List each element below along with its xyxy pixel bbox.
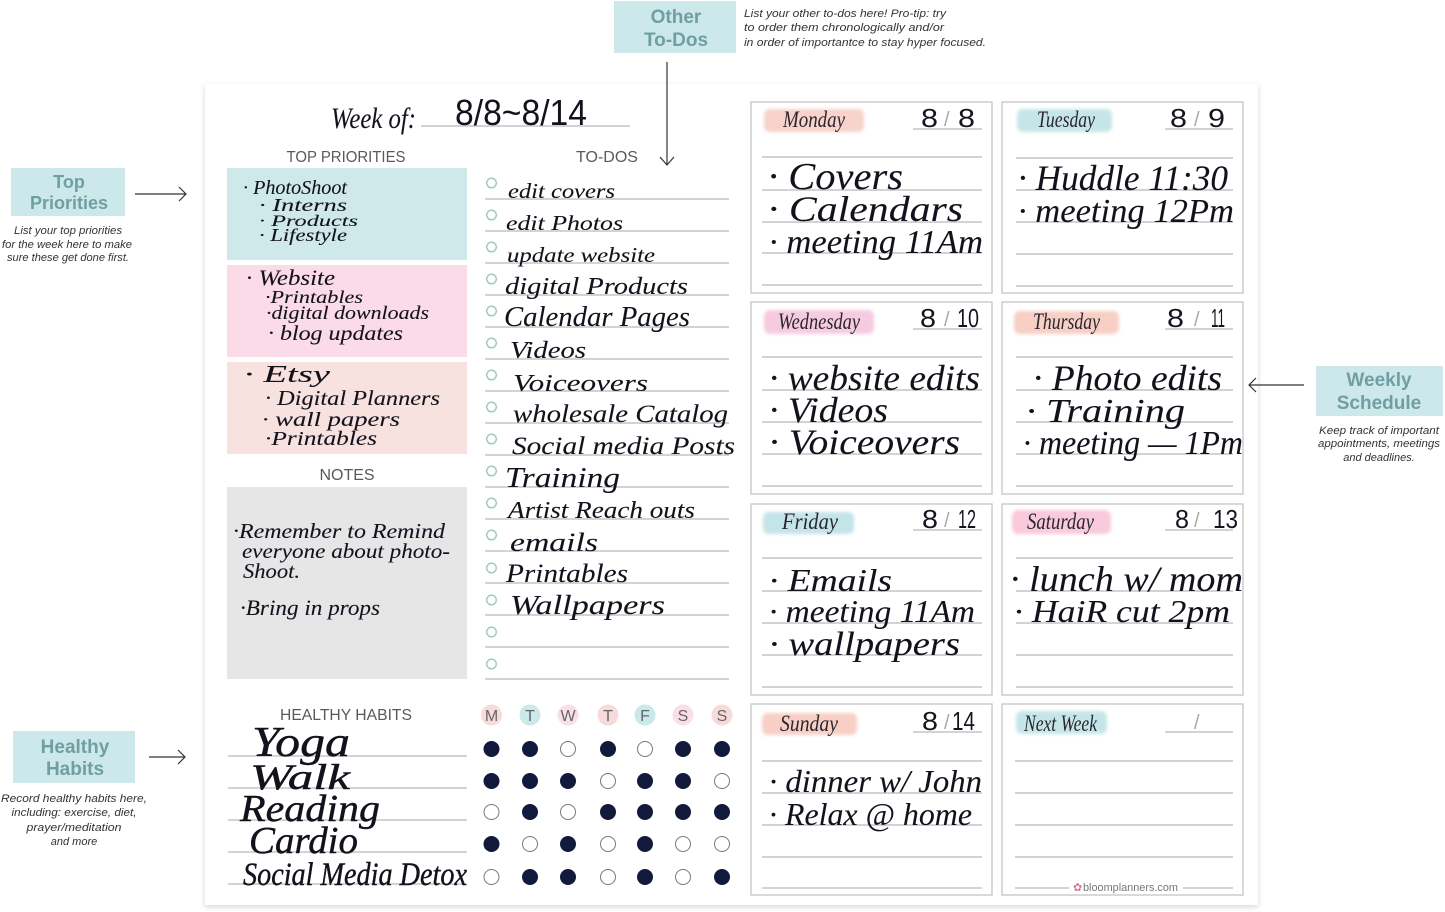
panel: tuesday: · Huddle 11:30 (1018, 158, 1228, 198)
to-do list: emails (510, 528, 598, 557)
callout: weekly schedule: Keep track of important (1319, 425, 1440, 437)
panel: monday: / (944, 109, 950, 131)
panel: wednesday: 10 (957, 303, 979, 333)
panel: wednesday (751, 302, 992, 494)
icon: flower: ✿ (1073, 882, 1082, 894)
panel: priority two: ·Printables (265, 287, 363, 307)
callout: weekly schedule: appointments, meetings (1318, 438, 1441, 450)
habit tracker: M (485, 708, 498, 725)
panel: tuesday (1002, 102, 1243, 293)
panel: priority three: · wall papers (262, 409, 400, 431)
panel: tuesday: · meeting 12Pm (1018, 193, 1234, 230)
panel: monday: 8 (921, 103, 938, 133)
habit tracker: F (640, 708, 650, 725)
callout: other to-dos: List your other to-dos here! Pro-tip: try (744, 8, 948, 20)
panel: notes (227, 487, 467, 679)
panel: next week: Next Week (1023, 711, 1098, 736)
to-do list: Artist Reach outs (506, 498, 695, 524)
callout: healthy habits (1, 731, 147, 848)
callout: other to-dos (614, 1, 986, 53)
panel: wednesday: / (944, 309, 950, 331)
panel: notes: everyone about photo- (242, 539, 450, 563)
callout: top priorities: Priorities (30, 193, 108, 213)
panel: priority one: · Lifestyle (259, 225, 347, 245)
to-do list: wholesale Catalog (513, 401, 728, 428)
panel: saturday: Saturday (1027, 509, 1095, 534)
panel: next week: / (1194, 712, 1200, 734)
healthy habits list: Walk (250, 757, 351, 797)
callout: healthy habits: prayer/meditation (25, 822, 121, 834)
panel: thursday: · Training (1026, 393, 1185, 430)
panel: next week (1002, 704, 1243, 895)
panel: monday: · meeting 11Am (769, 224, 983, 261)
to-do list: Voiceovers (513, 371, 648, 397)
panel: wednesday: · Voiceovers (769, 422, 960, 462)
panel: monday: · Covers (768, 156, 903, 198)
panel: notes: Shoot. (243, 559, 300, 583)
panel: priority three (227, 362, 467, 454)
panel: friday (751, 504, 992, 695)
panel: priority two: · Website (246, 265, 335, 290)
website credit: bloomplanners.com (1083, 882, 1178, 894)
panel: notes: ·Bring in props (240, 595, 380, 620)
panel: tuesday: 8 (1170, 103, 1187, 133)
panel: monday: · Calendars (768, 189, 963, 229)
panel: notes: ·Remember to Remind (233, 519, 446, 543)
callout: healthy habits: Habits (46, 759, 104, 780)
panel: priority two: · blog updates (268, 321, 403, 345)
panel: thursday (1002, 302, 1243, 494)
to-do list: Training (505, 463, 620, 494)
healthy habits list (228, 720, 467, 893)
callout: other to-dos: in order of importantce to stay hyper focused. (744, 37, 986, 49)
panel: wednesday: Wednesday (778, 309, 861, 334)
planner sheet (205, 84, 1258, 907)
panel: saturday: · lunch w/ mom (1010, 559, 1243, 599)
habit tracker: T (525, 708, 535, 725)
callout: other to-dos: to order them chronologically and/or (744, 22, 946, 34)
week of heading (331, 92, 630, 135)
panel: thursday: · Photo edits (1033, 358, 1222, 398)
habit tracker (481, 704, 732, 885)
panel: saturday: 8 (1175, 504, 1189, 534)
healthy habits list: Yoga (252, 720, 350, 766)
panel: thursday: / (1194, 309, 1200, 331)
callout: other to-dos: Other (651, 7, 702, 28)
panel: saturday: 13 (1213, 504, 1238, 534)
panel: thursday: 8 (1167, 303, 1184, 333)
panel: tuesday: Tuesday (1037, 107, 1096, 132)
callout: top priorities: Top (53, 172, 85, 192)
panel: priority two (227, 265, 467, 357)
habit tracker: S (717, 708, 727, 725)
panel: priority two: ·digital downloads (266, 303, 429, 324)
week of heading: 8/8~8/14 (455, 92, 587, 133)
panel: sunday (751, 704, 992, 895)
panel: thursday: · meeting — 1Pm (1023, 425, 1243, 462)
panel: monday (751, 102, 992, 293)
healthy habits list: Social Media Detox (243, 857, 467, 893)
arrow: top priorities (135, 187, 186, 201)
section heading: notes: NOTES (319, 467, 375, 484)
habit tracker: W (560, 708, 576, 725)
callout: weekly schedule (1316, 366, 1443, 464)
panel: friday: Friday (781, 509, 839, 534)
panel: friday: / (944, 510, 950, 532)
panel: monday: Monday (782, 107, 846, 132)
panel: monday: 8 (958, 103, 975, 133)
callout: healthy habits: Healthy (41, 737, 110, 758)
panel: priority one (227, 168, 467, 260)
callout: healthy habits: including: exercise, diet, (12, 807, 136, 819)
healthy habits list: Cardio (249, 820, 358, 862)
healthy habits list: Reading (239, 788, 380, 830)
callout: top priorities (2, 168, 132, 264)
panel: saturday: · HaiR cut 2pm (1014, 593, 1230, 629)
habit tracker: S (678, 708, 688, 725)
arrow: other to-dos (660, 62, 674, 165)
panel: sunday: · dinner w/ John (769, 763, 982, 799)
to-do list: edit covers (508, 179, 615, 203)
panel: priority three: ·Printables (265, 428, 377, 450)
panel: sunday: · Relax @ home (769, 796, 972, 832)
panel: sunday: Sunday (780, 711, 839, 736)
to-do list: Videos (510, 338, 586, 364)
panel: friday: · Emails (769, 562, 892, 598)
panel: friday: · meeting 11Am (769, 593, 975, 629)
panel: saturday: / (1194, 510, 1200, 532)
to-do list: update website (507, 243, 655, 267)
to-do list: Calendar Pages (504, 302, 690, 333)
panel: priority one: · Products (259, 213, 358, 230)
panel: thursday: 11 (1211, 303, 1225, 333)
panel: sunday: / (944, 712, 950, 734)
panel: priority three: · Etsy (244, 362, 331, 388)
panel: sunday: 14 (952, 706, 975, 736)
callout: top priorities: sure these get done first. (7, 252, 129, 264)
to-do list: Printables (505, 559, 628, 588)
callout: weekly schedule: Schedule (1337, 393, 1421, 414)
to-do list: digital Products (505, 274, 688, 300)
panel: sunday: 8 (922, 706, 938, 736)
to-do list: edit Photos (506, 211, 623, 235)
panel: wednesday: · website edits (769, 358, 980, 398)
panel: wednesday: · Videos (769, 390, 888, 430)
to-do list (485, 178, 735, 679)
to-do list: Social media Posts (512, 433, 735, 460)
callout: healthy habits: Record healthy habits here, (1, 793, 147, 805)
panel: friday: 12 (958, 504, 976, 534)
arrow: weekly schedule (1249, 378, 1304, 392)
section heading: to-dos: TO-DOS (576, 149, 638, 166)
section heading: healthy habits: HEALTHY HABITS (280, 707, 412, 724)
panel: thursday: Thursday (1033, 309, 1101, 334)
panel: priority three: · Digital Planners (265, 386, 440, 410)
panel: priority one: · Interns (259, 195, 347, 215)
habit tracker: T (603, 708, 613, 725)
callout: other to-dos: To-Dos (644, 30, 708, 51)
callout: top priorities: for the week here to make (2, 239, 132, 251)
callout: weekly schedule: and deadlines. (1343, 452, 1415, 464)
section heading: top priorities: TOP PRIORITIES (286, 149, 406, 166)
panel: wednesday: 8 (920, 303, 936, 333)
panel: saturday (1002, 504, 1243, 695)
week of heading: Week of: (331, 102, 416, 135)
panel: friday: · wallpapers (769, 626, 960, 663)
panel: priority one: · PhotoShoot (243, 177, 347, 199)
callout: top priorities: List your top priorities (14, 225, 123, 237)
panel: tuesday: 9 (1208, 103, 1225, 133)
panel: friday: 8 (922, 504, 938, 534)
callout: healthy habits: and more (51, 836, 97, 848)
panel: tuesday: / (1194, 109, 1200, 131)
callout: weekly schedule: Weekly (1346, 370, 1412, 391)
arrow: healthy habits (149, 750, 185, 764)
to-do list: Wallpapers (510, 590, 665, 620)
